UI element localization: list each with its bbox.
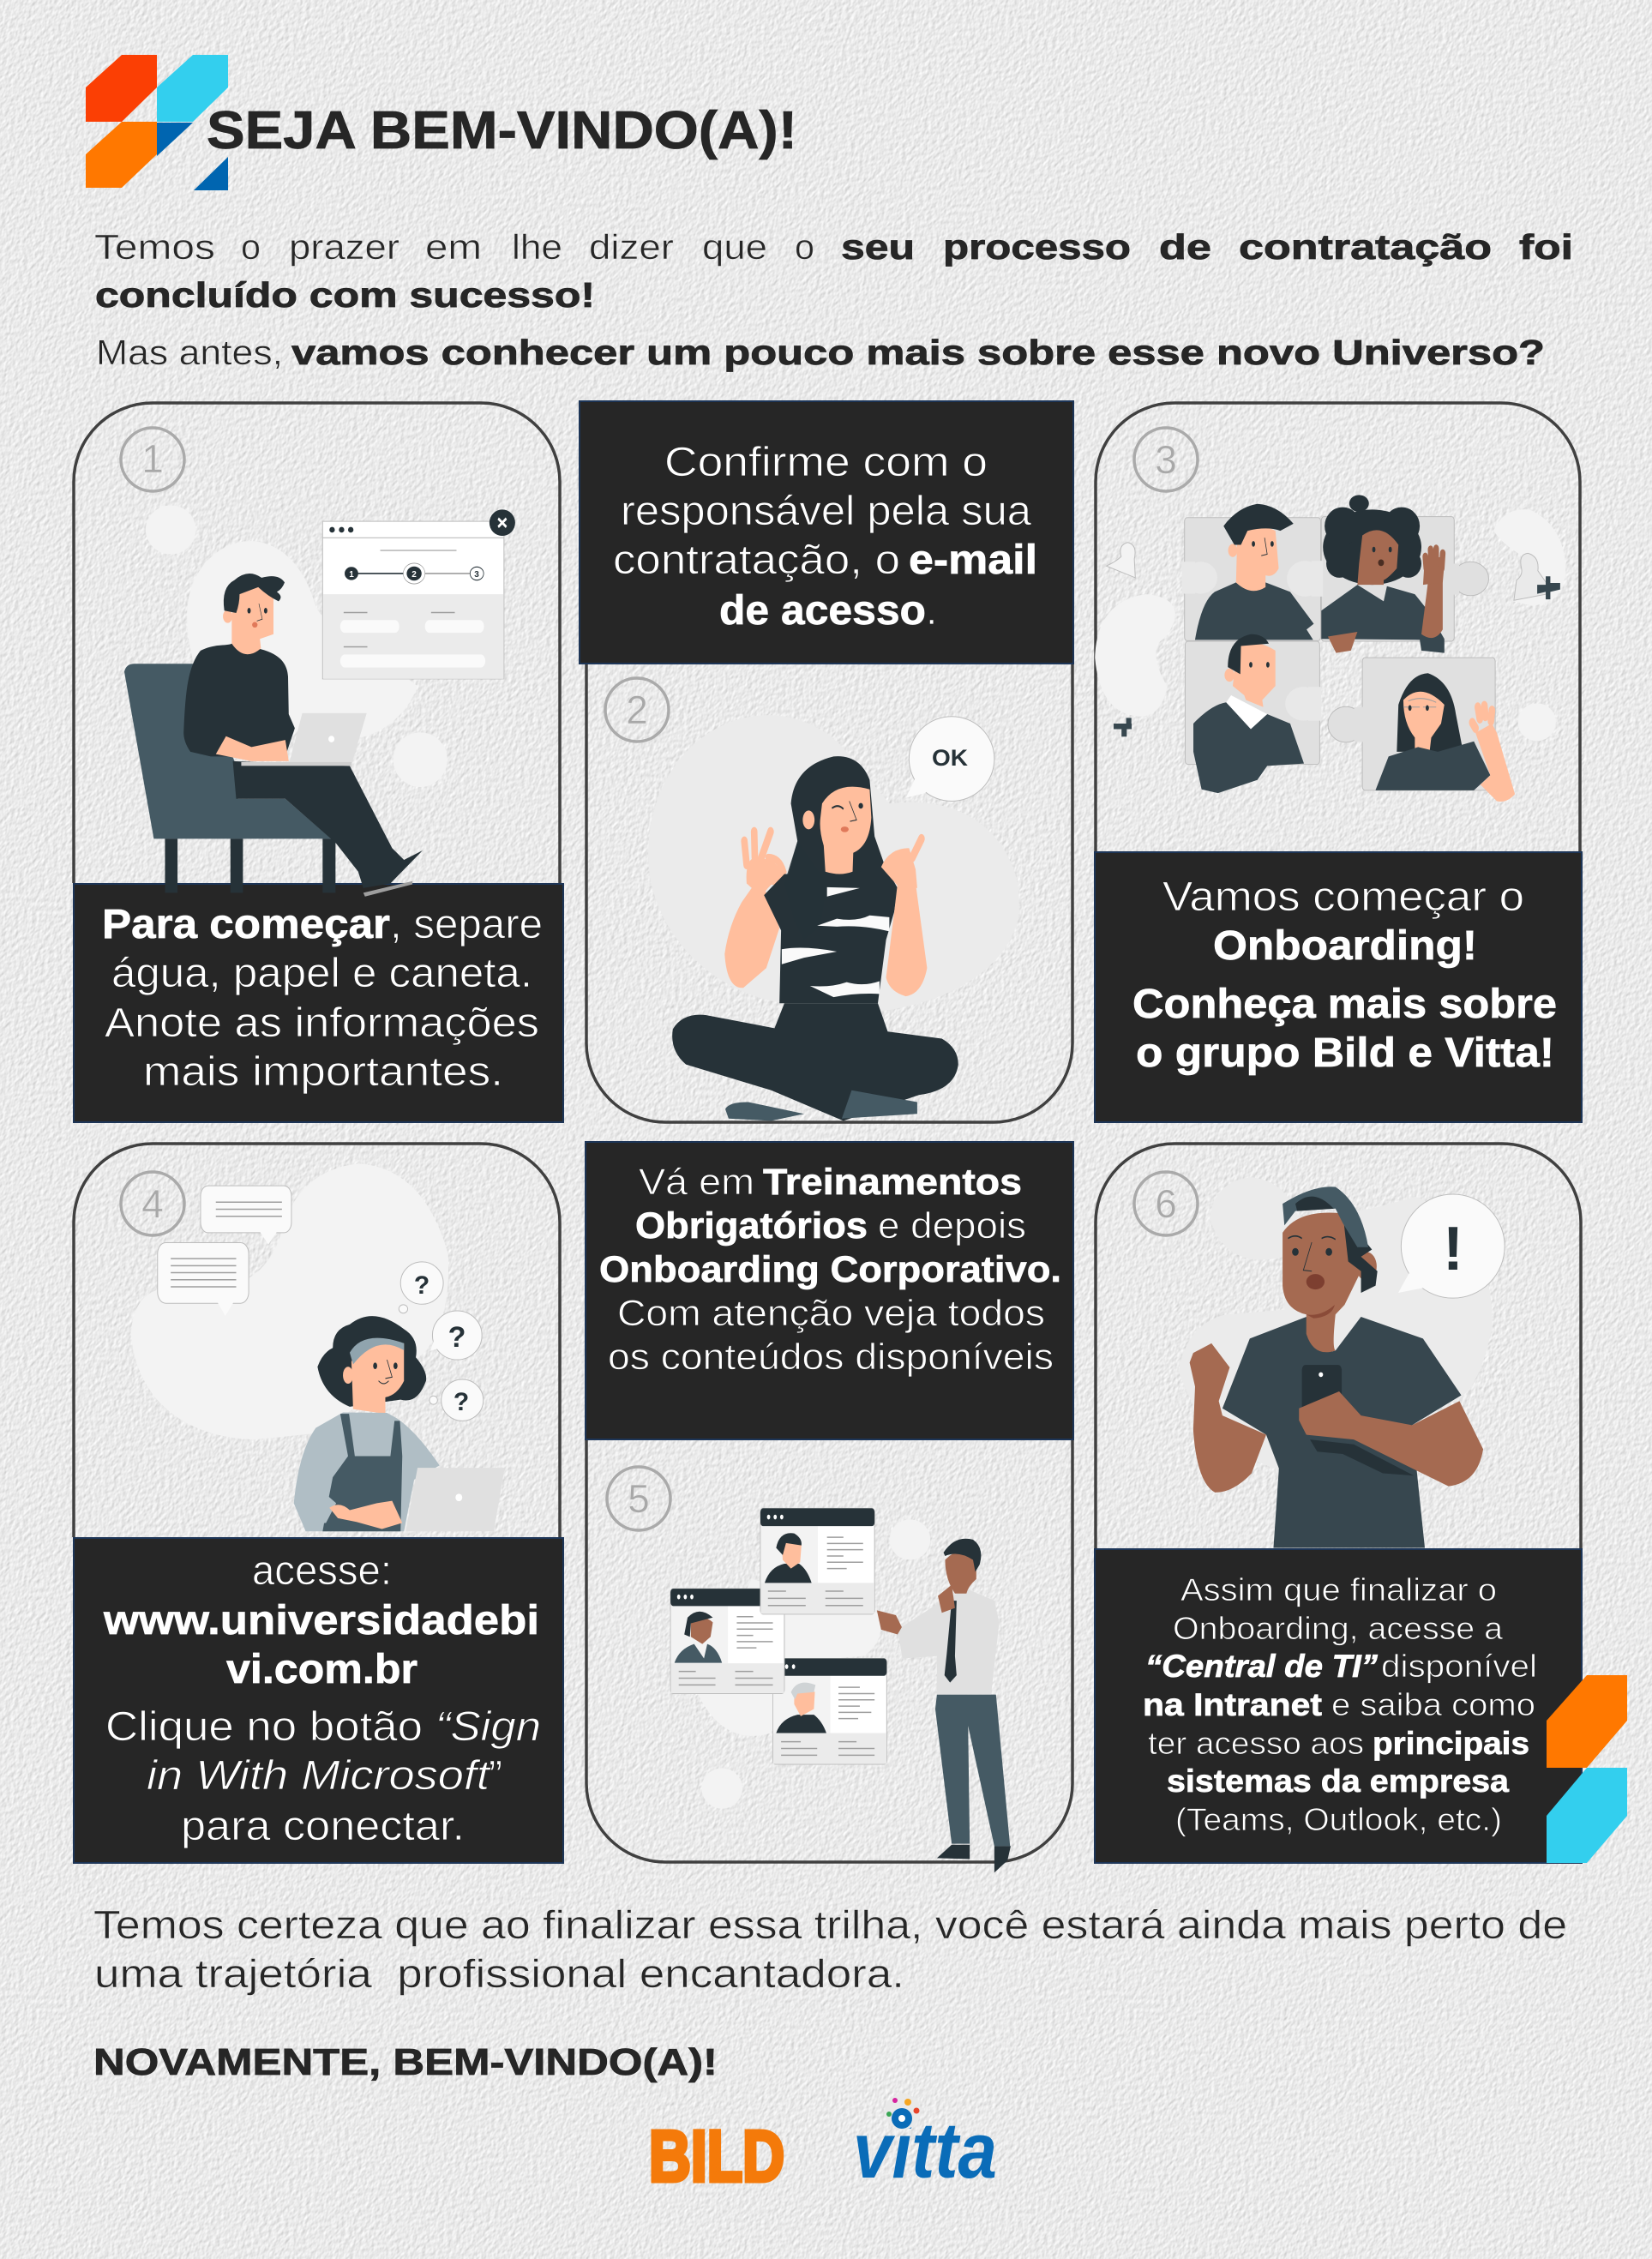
intro text: concluído com sucesso!: [95, 275, 595, 315]
caption box 6: principais: [1373, 1726, 1529, 1761]
stepper digits: 2: [411, 570, 417, 580]
intro text: que: [702, 227, 767, 267]
caption box 1: Anote as informações: [105, 1000, 539, 1046]
caption box 2: .: [926, 588, 937, 634]
caption box 6: ter acesso aos: [1148, 1726, 1364, 1761]
step number 3: [1134, 428, 1198, 491]
step number 6: [1134, 1172, 1198, 1235]
caption box 1: mais importantes.: [143, 1049, 503, 1095]
caption box 6: [1095, 1549, 1582, 1863]
caption box 1: , separe: [390, 902, 543, 947]
intro text: o: [795, 227, 814, 267]
caption box 5: Vá em: [639, 1162, 754, 1203]
intro text: dizer: [589, 227, 674, 267]
caption box 4: acesse:: [252, 1548, 392, 1594]
stepper digits: 1: [349, 570, 354, 580]
illustration: man with phone and cap: [1179, 1177, 1493, 1547]
panel 2: [580, 401, 1073, 1122]
intro text: contratação: [1239, 227, 1492, 267]
caption box 6: “Central de TI”: [1145, 1649, 1379, 1684]
caption box 3: Onboarding!: [1213, 923, 1477, 969]
illustration: woman giving OK sign: [648, 715, 1019, 1120]
caption box 4: para conectar.: [181, 1804, 465, 1849]
step number 5: [607, 1467, 670, 1530]
intro text: em: [425, 227, 482, 267]
intro text: foi: [1519, 227, 1573, 267]
caption box 4: vi.com.br: [226, 1647, 418, 1692]
caption box 6: disponível: [1381, 1649, 1537, 1684]
caption box 6: (Teams, Outlook, etc.): [1175, 1802, 1502, 1837]
illustration: team as puzzle pieces: [1095, 495, 1565, 802]
speech bubble OK: OK: [932, 745, 969, 771]
intro text: o: [241, 227, 261, 267]
caption box 4: in With Microsoft: [147, 1753, 491, 1799]
intro text: prazer: [289, 227, 399, 267]
question bubbles: [399, 1262, 484, 1421]
intro text: lhe: [512, 227, 562, 267]
logo BILD: BILD: [649, 2116, 784, 2196]
caption box 5: Treinamentos: [763, 1162, 1022, 1203]
step number 3: 3: [1155, 437, 1177, 482]
caption box 5: Com atenção veja todos: [617, 1293, 1045, 1334]
caption box 6: na Intranet: [1143, 1687, 1322, 1722]
caption box 3: o grupo Bild e Vitta!: [1136, 1030, 1554, 1076]
caption box 2: e-mail: [909, 538, 1037, 583]
caption box 6: Onboarding, acesse a: [1173, 1611, 1503, 1646]
question bubbles: ?: [414, 1271, 430, 1300]
question bubbles: ?: [448, 1321, 466, 1354]
step number 1: 1: [141, 436, 164, 481]
caption box 4: www.universidadebi: [103, 1598, 539, 1643]
intro text: processo: [943, 227, 1131, 267]
title: SEJA BEM-VINDO(A)!: [207, 101, 797, 160]
caption box 3: Vamos começar o: [1162, 874, 1524, 920]
step number 4: 4: [141, 1181, 164, 1226]
panel 3: [1095, 403, 1582, 1122]
panel 4: [74, 1144, 563, 1863]
step number 2: [605, 678, 669, 742]
intro text: Temos: [94, 227, 215, 267]
closing text: Temos certeza que ao finalizar essa trilha, você estará ainda mais perto de: [93, 1902, 1567, 1947]
intro text: Mas antes,: [96, 333, 283, 372]
caption box 6: e saiba como: [1331, 1687, 1535, 1722]
illustration: woman with questions and laptop: [131, 1163, 505, 1531]
intro text: vamos conhecer um pouco mais sobre esse novo Universo?: [291, 333, 1545, 372]
step number 5: 5: [628, 1476, 650, 1521]
caption box 4: [74, 1538, 563, 1863]
caption box 3: Conheça mais sobre: [1132, 982, 1557, 1027]
caption box 5: Obrigatórios: [635, 1205, 868, 1247]
stepper digits: 3: [474, 570, 479, 580]
closing heading: NOVAMENTE, BEM-VINDO(A)!: [93, 2041, 718, 2083]
caption box 3: [1095, 852, 1582, 1122]
logo mark: [86, 55, 228, 190]
caption box 4: “Sign: [436, 1704, 541, 1750]
caption box 5: e depois: [878, 1205, 1026, 1247]
caption box 4: ”: [489, 1753, 502, 1799]
speech bubble exclamation: [1398, 1194, 1505, 1298]
panel 5: [586, 1142, 1073, 1872]
brand shapes bottom right: [1547, 1675, 1627, 1863]
intro text: seu: [841, 227, 915, 267]
caption box 6: Assim que finalizar o: [1180, 1572, 1497, 1607]
panel 1: [74, 403, 563, 1122]
logo Vitta: vitta: [853, 2107, 997, 2195]
speech bubble exclamation: !: [1443, 1215, 1463, 1283]
closing text: uma trajetória profissional encantadora.: [94, 1951, 904, 1996]
caption box 5: Onboarding Corporativo.: [599, 1249, 1061, 1290]
caption box 2: Confirme com o: [664, 440, 988, 485]
stepper digits: [349, 570, 479, 580]
caption box 2: de acesso: [719, 588, 926, 634]
speech bubble OK: [906, 717, 994, 801]
step number 2: 2: [626, 688, 648, 732]
step number 4: [121, 1172, 184, 1235]
caption box 5: os conteúdos disponíveis: [608, 1337, 1054, 1378]
caption box 2: [580, 401, 1073, 664]
intro text: [94, 227, 1573, 372]
step number 6: 6: [1155, 1181, 1177, 1226]
caption box 6: sistemas da empresa: [1167, 1763, 1509, 1799]
caption box 1: [74, 884, 563, 1122]
chat bubbles: [158, 1186, 291, 1316]
step number 1: [121, 428, 184, 491]
caption box 2: responsável pela sua: [621, 489, 1031, 534]
caption box 1: Para começar: [102, 902, 390, 947]
panel 6: [1095, 1144, 1582, 1863]
question bubbles: ?: [454, 1388, 469, 1416]
illustration: man reviewing profile cards: [670, 1508, 1011, 1872]
closing text: [93, 1902, 1567, 1996]
caption box 2: contratação, o: [613, 538, 900, 583]
caption box 1: água, papel e caneta.: [111, 951, 532, 996]
caption box 4: Clique no botão: [105, 1704, 423, 1750]
illustration: man on armchair with laptop: [124, 505, 515, 897]
caption box 5: [586, 1142, 1073, 1439]
intro text: de: [1159, 227, 1211, 267]
